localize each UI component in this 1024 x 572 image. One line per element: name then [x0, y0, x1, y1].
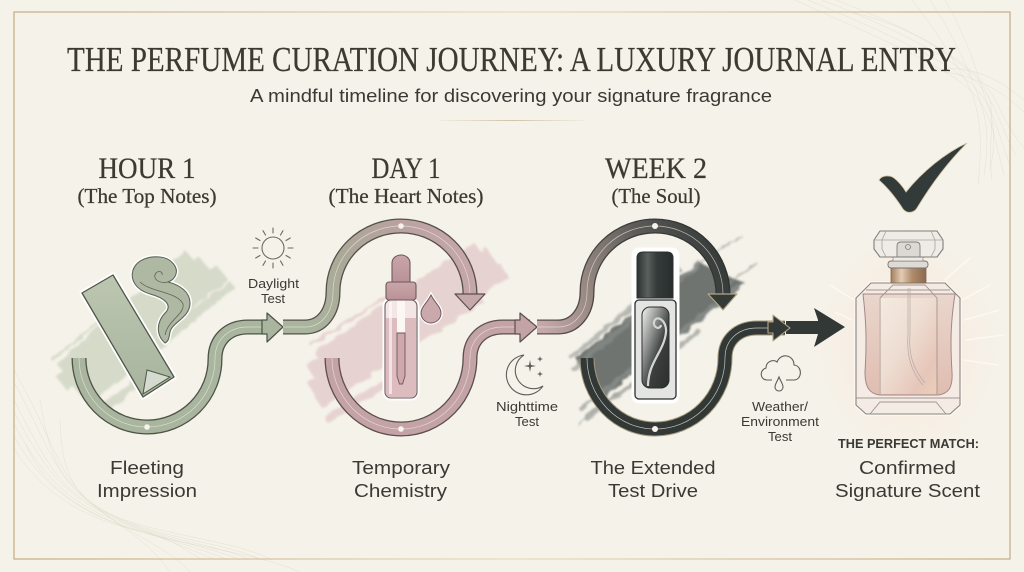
label: weather environment test: Environment [741, 414, 819, 429]
icon: rollerball bottle [634, 250, 677, 401]
icon: scent blotter strip [82, 275, 174, 397]
icon: check mark [879, 143, 967, 212]
caption: fleeting impression: Impression [97, 481, 197, 501]
stage 3 heading: (The Soul) [612, 184, 700, 208]
caption: the extended test drive: Test Drive [608, 481, 698, 501]
stage 2 heading: DAY 1 [372, 152, 440, 185]
stage 2 heading: (The Heart Notes) [328, 184, 484, 208]
label: daylight test [248, 276, 299, 306]
label: weather environment test [741, 399, 819, 444]
caption: the perfect match: THE PERFECT MATCH: [838, 437, 979, 451]
brush stroke: charcoal [570, 236, 756, 424]
stage 1 heading: (The Top Notes) [78, 184, 217, 208]
caption: temporary chemistry [352, 458, 450, 501]
caption: the extended test drive: The Extended [590, 458, 716, 478]
label: weather environment test: Weather/ [752, 399, 808, 414]
icon: dropper bottle [385, 255, 441, 398]
caption: the perfect match: Confirmed [859, 458, 956, 478]
caption: temporary chemistry: Temporary [352, 458, 450, 478]
caption: fleeting impression: Fleeting [110, 458, 184, 478]
label: nighttime test: Test [515, 414, 539, 429]
label: weather environment test: Test [768, 429, 792, 444]
ribbon path: rose to charcoal loop with arrow [537, 223, 737, 327]
brush stroke: rose [310, 248, 504, 420]
label: nighttime test: Nighttime [496, 399, 558, 414]
label: daylight test: Daylight [248, 276, 299, 291]
caption: the extended test drive [590, 458, 716, 501]
stage 3 heading [605, 152, 707, 208]
icon: scent wisp [132, 257, 190, 343]
perfume glow [836, 253, 980, 437]
title divider [439, 120, 585, 121]
perfume glow rays [830, 258, 1003, 365]
stage 2 heading [328, 152, 484, 208]
caption: temporary chemistry: Chemistry [354, 481, 447, 501]
ribbon path: sage start to first arrow [79, 313, 283, 430]
icon: perfume bottle [856, 231, 960, 414]
icon: sun [253, 228, 293, 268]
icon: moon and stars [506, 355, 543, 395]
subtitle: A mindful timeline for discovering your signature fragrance [250, 86, 772, 106]
ribbon path: charcoal start to final arrow [587, 308, 845, 432]
stage 3 heading: WEEK 2 [605, 152, 707, 185]
stage 1 heading: HOUR 1 [98, 152, 196, 185]
brush stroke: sage [52, 256, 232, 412]
ribbon path: sage to rose loop with arrow [283, 223, 485, 327]
stage 1 heading [78, 152, 217, 208]
caption: fleeting impression [97, 458, 197, 501]
label: nighttime test [496, 399, 558, 429]
icon: rain cloud [761, 356, 800, 391]
label: daylight test: Test [261, 291, 285, 306]
ribbon path: rose start to second arrow [332, 313, 537, 432]
caption: the perfect match: Signature Scent [835, 481, 980, 501]
caption: the perfect match [835, 437, 980, 501]
